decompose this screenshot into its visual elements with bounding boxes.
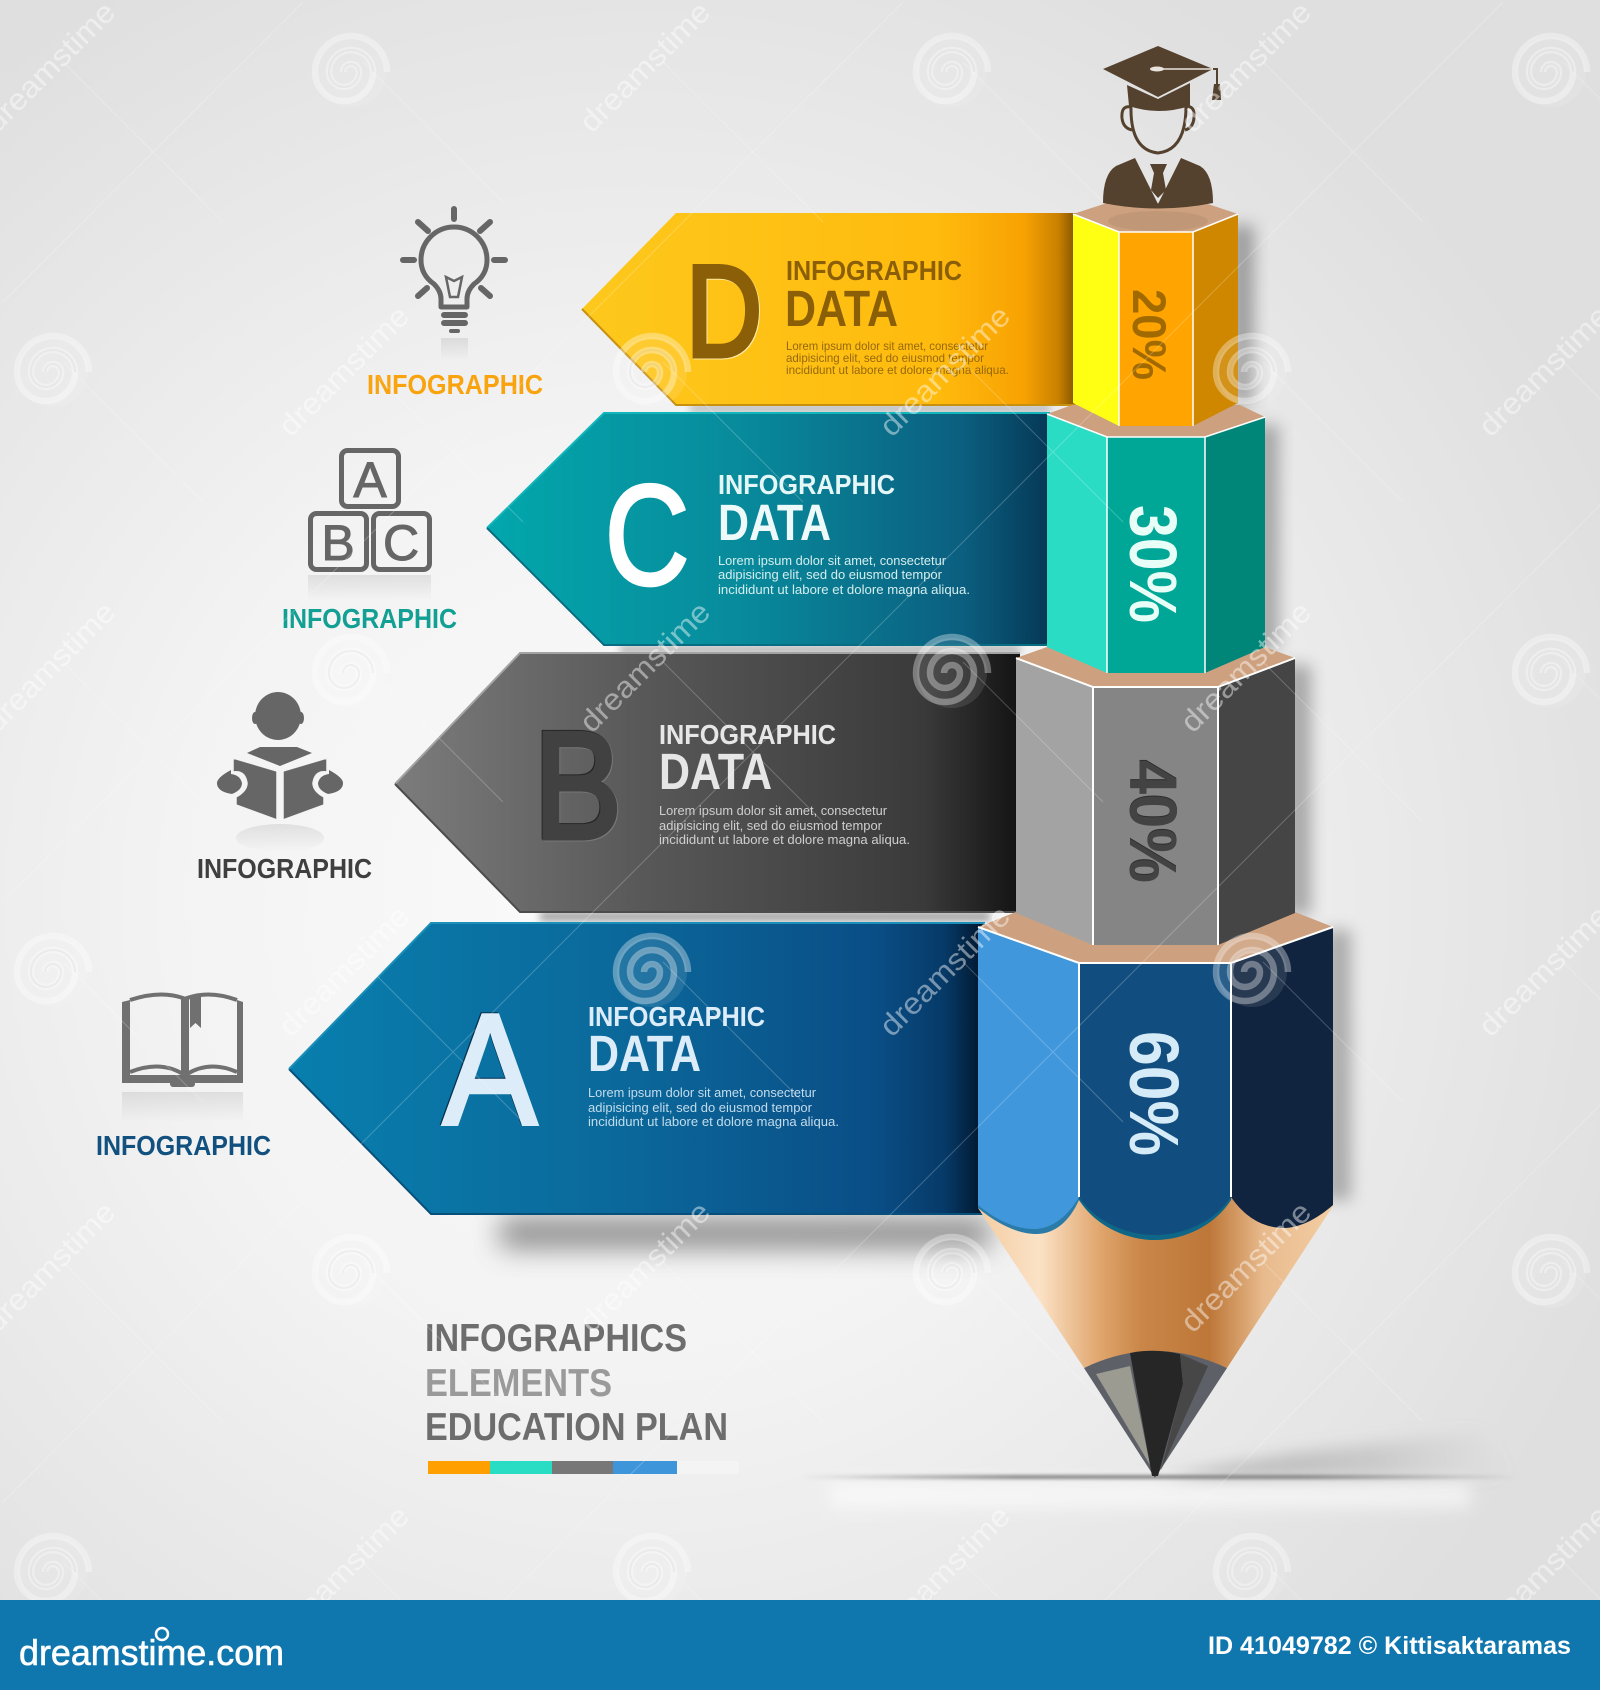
body text D: Lorem ipsum dolor sit amet, consectetur (786, 339, 988, 353)
watermark overlay: dreamstime (874, 900, 1017, 1043)
title block (425, 1317, 728, 1449)
body text A: incididunt ut labore et dolore magna aliqua. (588, 1114, 839, 1129)
label 60%: 60% (1115, 1031, 1193, 1156)
drop shadows behind arrows and pencil (500, 225, 1351, 1248)
segment C 30% (1047, 405, 1265, 673)
title block: ELEMENTS (425, 1362, 612, 1405)
icon: ABC blocks: A (353, 452, 387, 508)
arrow panel C (487, 413, 1050, 645)
arrow panel A (289, 923, 985, 1214)
body text B (659, 803, 910, 847)
letter C: C (605, 456, 689, 615)
letter D: D (686, 238, 762, 384)
label: reader caption: INFOGRAPHIC (197, 853, 372, 884)
body text B: adipisicing elit, sed do eiusmod tempor (659, 818, 883, 833)
pencil (978, 203, 1333, 1478)
pencil wood cone (978, 1190, 1333, 1368)
watermark overlay: dreamstime (574, 596, 717, 739)
label: blocks caption: INFOGRAPHIC (282, 603, 457, 634)
icon: ABC blocks: C (383, 515, 419, 571)
label 30%: 30% (1115, 505, 1190, 623)
label: book caption: INFOGRAPHIC (96, 1130, 271, 1161)
arrow panel B (395, 653, 1020, 912)
watermark overlay: dreamstime (574, 0, 717, 139)
watermark overlay: dreamstime (1175, 596, 1318, 739)
body text C: Lorem ipsum dolor sit amet, consectetur (718, 553, 947, 568)
data label C: DATA (718, 494, 831, 551)
watermark overlay: dreamstime (273, 300, 416, 443)
arrow panel D (582, 213, 1076, 405)
watermark overlay: dreamstime (874, 1500, 1017, 1643)
watermark overlay: dreamstime (1175, 1196, 1318, 1339)
icon: light bulb (403, 209, 505, 360)
watermark overlay: dreamstime (874, 300, 1017, 443)
watermark overlay: dreamstime (273, 1500, 416, 1643)
segment D 20% (1073, 203, 1238, 426)
colour legend bar (428, 1461, 739, 1474)
segment B 40% (1016, 647, 1295, 945)
icon: person reading (217, 692, 343, 852)
heading A: INFOGRAPHIC (588, 1001, 765, 1032)
body text A: adipisicing elit, sed do eiusmod tempor (588, 1100, 813, 1115)
data label A: DATA (588, 1025, 701, 1082)
label 40%: 40% (1115, 760, 1190, 883)
body text A: Lorem ipsum dolor sit amet, consectetur (588, 1085, 817, 1100)
heading D: INFOGRAPHIC (786, 255, 962, 286)
footer bar (0, 1600, 1600, 1690)
letter B: B (534, 701, 622, 871)
pencil lead tip (1084, 1351, 1227, 1478)
watermark overlay: dreamstime (273, 900, 416, 1043)
letter A: A (443, 982, 538, 1158)
footer logo text: dreamstime.com (19, 1632, 284, 1673)
ground shadow under pencil tip (800, 1432, 1520, 1508)
watermark overlay: dreamstime (1175, 0, 1318, 139)
body text B: Lorem ipsum dolor sit amet, consectetur (659, 803, 888, 818)
icon: open book (122, 994, 243, 1122)
label 20%: 20% (1123, 289, 1176, 380)
heading C: INFOGRAPHIC (718, 469, 895, 500)
segment A 60% (978, 912, 1333, 1240)
watermark overlay: dreamstime (574, 1196, 717, 1339)
body text C: adipisicing elit, sed do eiusmod tempor (718, 567, 943, 582)
label: bulb caption: INFOGRAPHIC (367, 369, 543, 400)
icon: ABC blocks: B (321, 515, 355, 571)
body text A (588, 1085, 839, 1129)
body text C: incididunt ut labore et dolore magna aliqua. (718, 582, 970, 597)
body text D (786, 339, 1009, 377)
footer spiral mark (156, 1628, 168, 1640)
icon: graduate with mortarboard (1103, 46, 1221, 208)
heading B: INFOGRAPHIC (659, 719, 836, 750)
data label B: DATA (659, 743, 772, 800)
footer image id: ID 41049782 © Kittisaktaramas (1208, 1632, 1571, 1660)
icon: ABC blocks (308, 450, 431, 601)
body text D: adipisicing elit, sed do eiusmod tempor (786, 351, 984, 365)
data label D: DATA (785, 280, 898, 337)
body text B: incididunt ut labore et dolore magna aliqua. (659, 832, 910, 847)
body text D: incididunt ut labore et dolore magna aliqua. (786, 363, 1009, 377)
title block: INFOGRAPHICS (425, 1317, 687, 1360)
body text C (718, 553, 970, 597)
title block: EDUCATION PLAN (425, 1406, 728, 1449)
